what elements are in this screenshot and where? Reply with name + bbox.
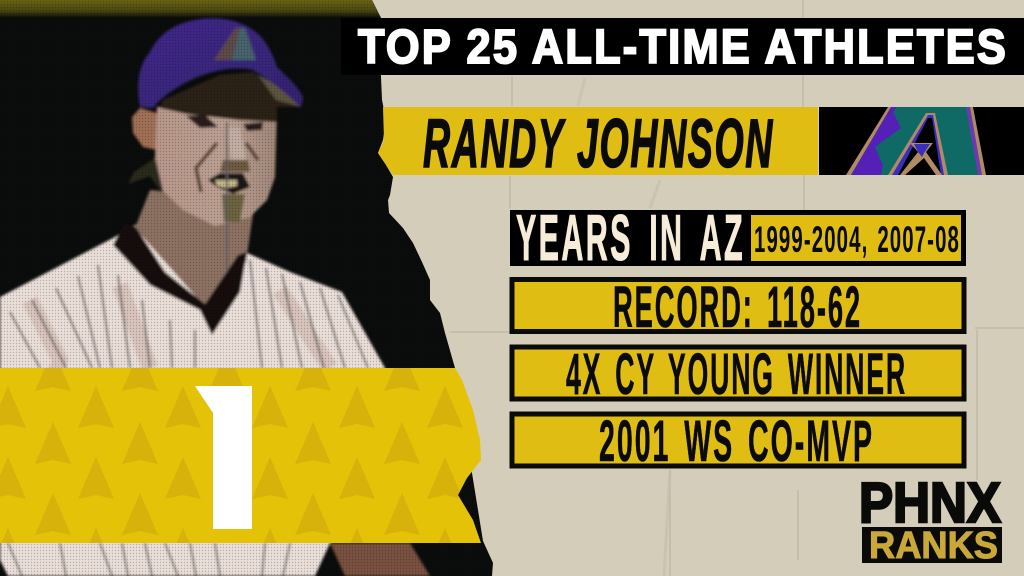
text: 1 [213,348,251,571]
PHNX Ranks logo: RANKS [869,525,998,567]
chin shadow [222,194,245,222]
jersey [0,225,400,576]
halftone overlay [0,0,500,576]
nose shading [226,128,246,160]
mouth [208,173,250,194]
hair [128,158,160,190]
olive top strip [0,0,400,18]
face [155,107,277,226]
rank number [195,348,252,571]
cap [138,18,303,108]
cheek creases [196,143,258,192]
forearm [330,543,430,576]
photo panel: Randy Johnson [0,0,500,576]
neck [135,190,255,308]
PHNX Ranks logo: PHNX [859,471,1001,535]
crease [226,122,228,272]
PHNX Ranks logo [859,471,1002,567]
eyes [186,115,263,131]
collar [113,224,247,335]
yellow number band [0,368,481,543]
brim shadow [160,72,303,122]
triangle pattern [0,368,463,543]
stat: years in AZ: YEARS IN AZ [516,201,745,274]
team logo panel [819,107,1024,175]
cap logo [214,28,256,60]
ear [132,108,157,150]
name bar [378,105,818,182]
stat: record [512,275,964,340]
